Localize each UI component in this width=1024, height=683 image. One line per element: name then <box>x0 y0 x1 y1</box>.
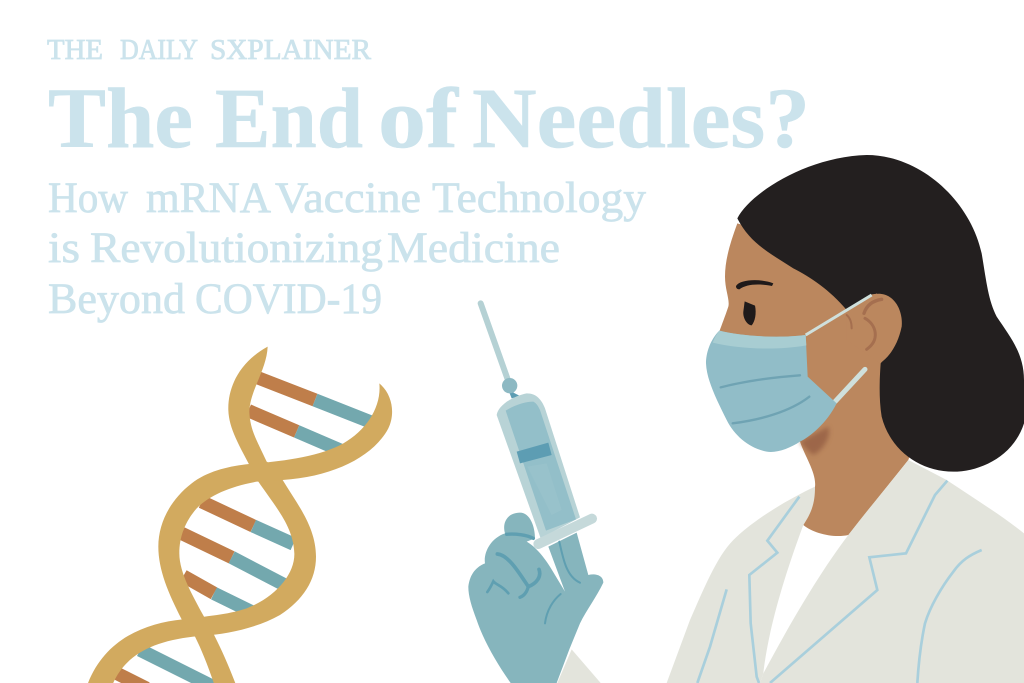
mask ear straps <box>806 295 872 335</box>
subtitle <box>48 175 647 323</box>
coat cuff <box>557 649 601 683</box>
title: Needles? <box>472 70 810 166</box>
syringe band <box>517 443 552 463</box>
subtitle: mRNA <box>146 175 271 222</box>
hair <box>737 155 1024 472</box>
syringe hub <box>502 378 520 398</box>
syringe barrel <box>497 393 580 538</box>
subtitle: Revolutionizing <box>90 225 383 272</box>
subtitle: Medicine <box>387 225 560 272</box>
icon: DNA double helix <box>87 347 392 683</box>
subtitle: How <box>48 175 128 222</box>
subtitle: COVID-19 <box>195 276 382 323</box>
needle <box>481 303 507 378</box>
jaw shadow <box>800 427 829 455</box>
title: The <box>48 70 193 166</box>
header: publication name <box>47 34 372 66</box>
title <box>48 70 810 166</box>
glove and thumb <box>468 513 603 683</box>
mask folds <box>721 375 809 423</box>
face and neck <box>719 223 927 536</box>
mask top band <box>713 331 806 349</box>
header: publication name: SXPLAINER <box>210 34 372 66</box>
title: End <box>215 70 363 166</box>
subtitle: Vaccine <box>275 175 421 222</box>
lab coat <box>667 460 1024 683</box>
title: of <box>378 70 460 166</box>
subtitle: Beyond <box>48 276 185 323</box>
icon: gloved hand holding syringe <box>468 303 603 683</box>
face mask <box>706 295 872 452</box>
glove creases <box>487 534 580 623</box>
ear <box>847 294 902 363</box>
coat seams <box>697 481 982 683</box>
syringe liquid <box>506 402 576 531</box>
syringe flange <box>538 519 592 544</box>
eyebrow and eye <box>736 280 773 325</box>
figure: health worker <box>667 155 1024 683</box>
header: publication name: DAILY <box>120 34 198 66</box>
header: publication name: THE <box>47 34 103 66</box>
subtitle: is <box>48 225 80 272</box>
subtitle: Technology <box>432 175 647 222</box>
